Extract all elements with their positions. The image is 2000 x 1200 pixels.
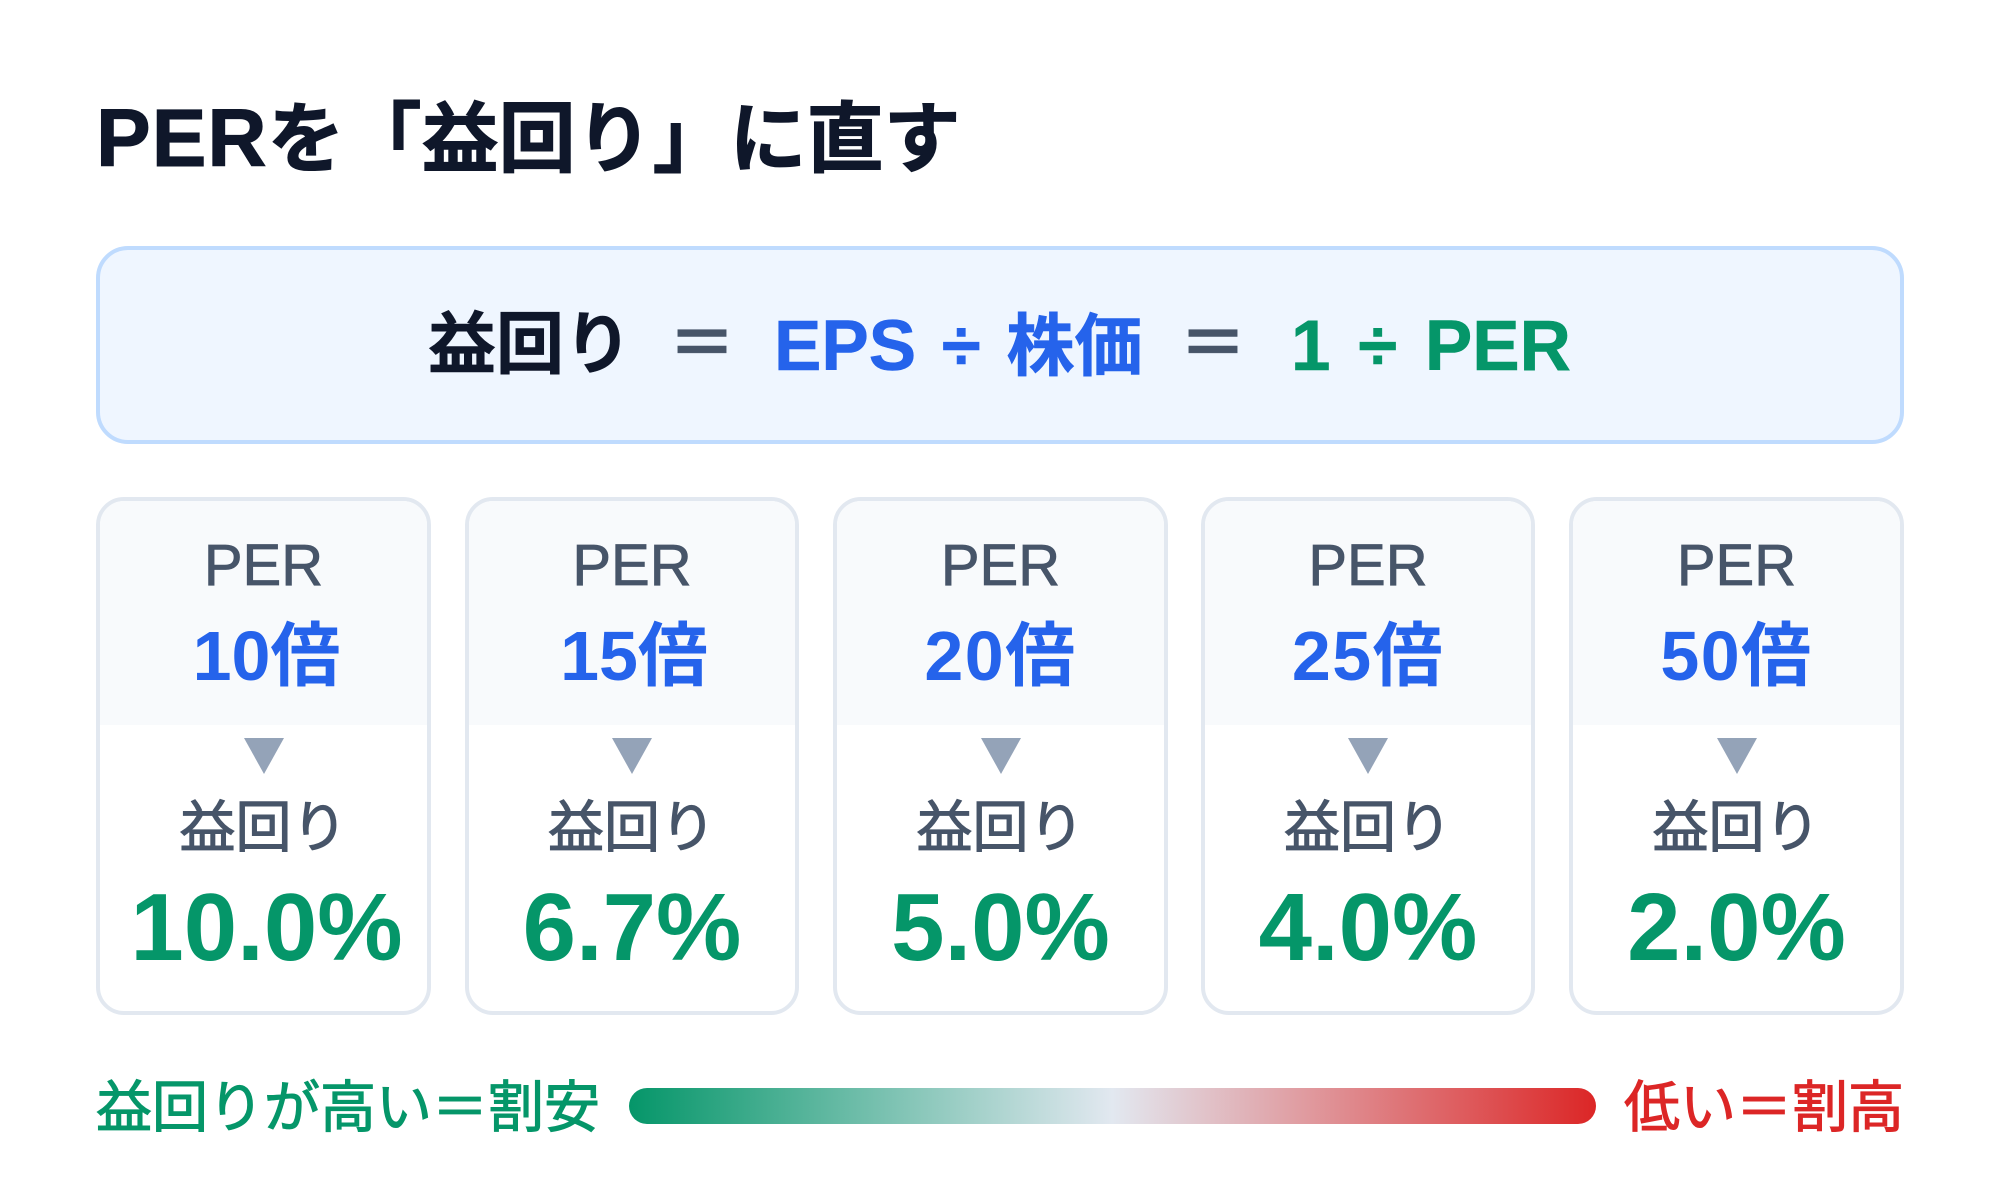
- card: PER 20: [833, 497, 1168, 1015]
- card: PER 50: [1569, 497, 1904, 1015]
- yield value: 4.0%: [1259, 874, 1477, 981]
- multiple: 50倍: [1660, 617, 1813, 695]
- title: PERを「益回り」に直す: [96, 93, 961, 184]
- label: PER: [1677, 533, 1796, 598]
- arrow: [980, 738, 1020, 774]
- multiple: 15倍: [560, 617, 708, 695]
- yield value: 2.0%: [1627, 874, 1846, 981]
- formula term: 1 divided by PER: 1 ÷ PER: [1291, 307, 1571, 386]
- scale label: low yield: 低い＝割高: [1624, 1076, 1904, 1139]
- label: PER: [204, 533, 323, 598]
- card header: [1573, 501, 1900, 725]
- arrow: [244, 738, 284, 774]
- scale label: high yield: 益回りが高い＝割安: [96, 1076, 600, 1139]
- multiple: 20倍: [924, 617, 1077, 695]
- arrow: [1716, 738, 1756, 774]
- label: PER: [941, 533, 1060, 598]
- yield value: 10.0%: [130, 874, 403, 981]
- multiple: 10倍: [193, 617, 340, 695]
- card header: [837, 501, 1164, 725]
- card: PER 25: [1201, 497, 1535, 1015]
- yield value: 6.7%: [523, 874, 741, 981]
- yield label: 益回り: [1284, 796, 1452, 859]
- card: PER 15: [465, 497, 799, 1015]
- card header: [100, 501, 427, 725]
- equals sign: ＝: [668, 307, 736, 383]
- gradient scale bar: [629, 1088, 1596, 1124]
- label: PER: [572, 533, 692, 598]
- yield label: 益回り: [1652, 796, 1820, 859]
- label: PER: [1308, 533, 1428, 598]
- multiple: 25倍: [1292, 617, 1444, 695]
- card header: [1205, 501, 1531, 725]
- formula term: EPS divided by price: EPS ÷ 株価: [774, 307, 1143, 386]
- equals sign: ＝: [1179, 307, 1247, 383]
- panel: formula: [96, 246, 1904, 444]
- yield label: 益回り: [916, 796, 1084, 859]
- yield value: 5.0%: [891, 874, 1110, 981]
- card: PER 10: [96, 497, 431, 1015]
- formula term: yield: 益回り: [428, 307, 632, 383]
- arrow: [612, 738, 652, 774]
- yield label: 益回り: [180, 796, 348, 859]
- yield label: 益回り: [548, 796, 716, 859]
- card header: [469, 501, 795, 725]
- arrow: [1348, 738, 1388, 774]
